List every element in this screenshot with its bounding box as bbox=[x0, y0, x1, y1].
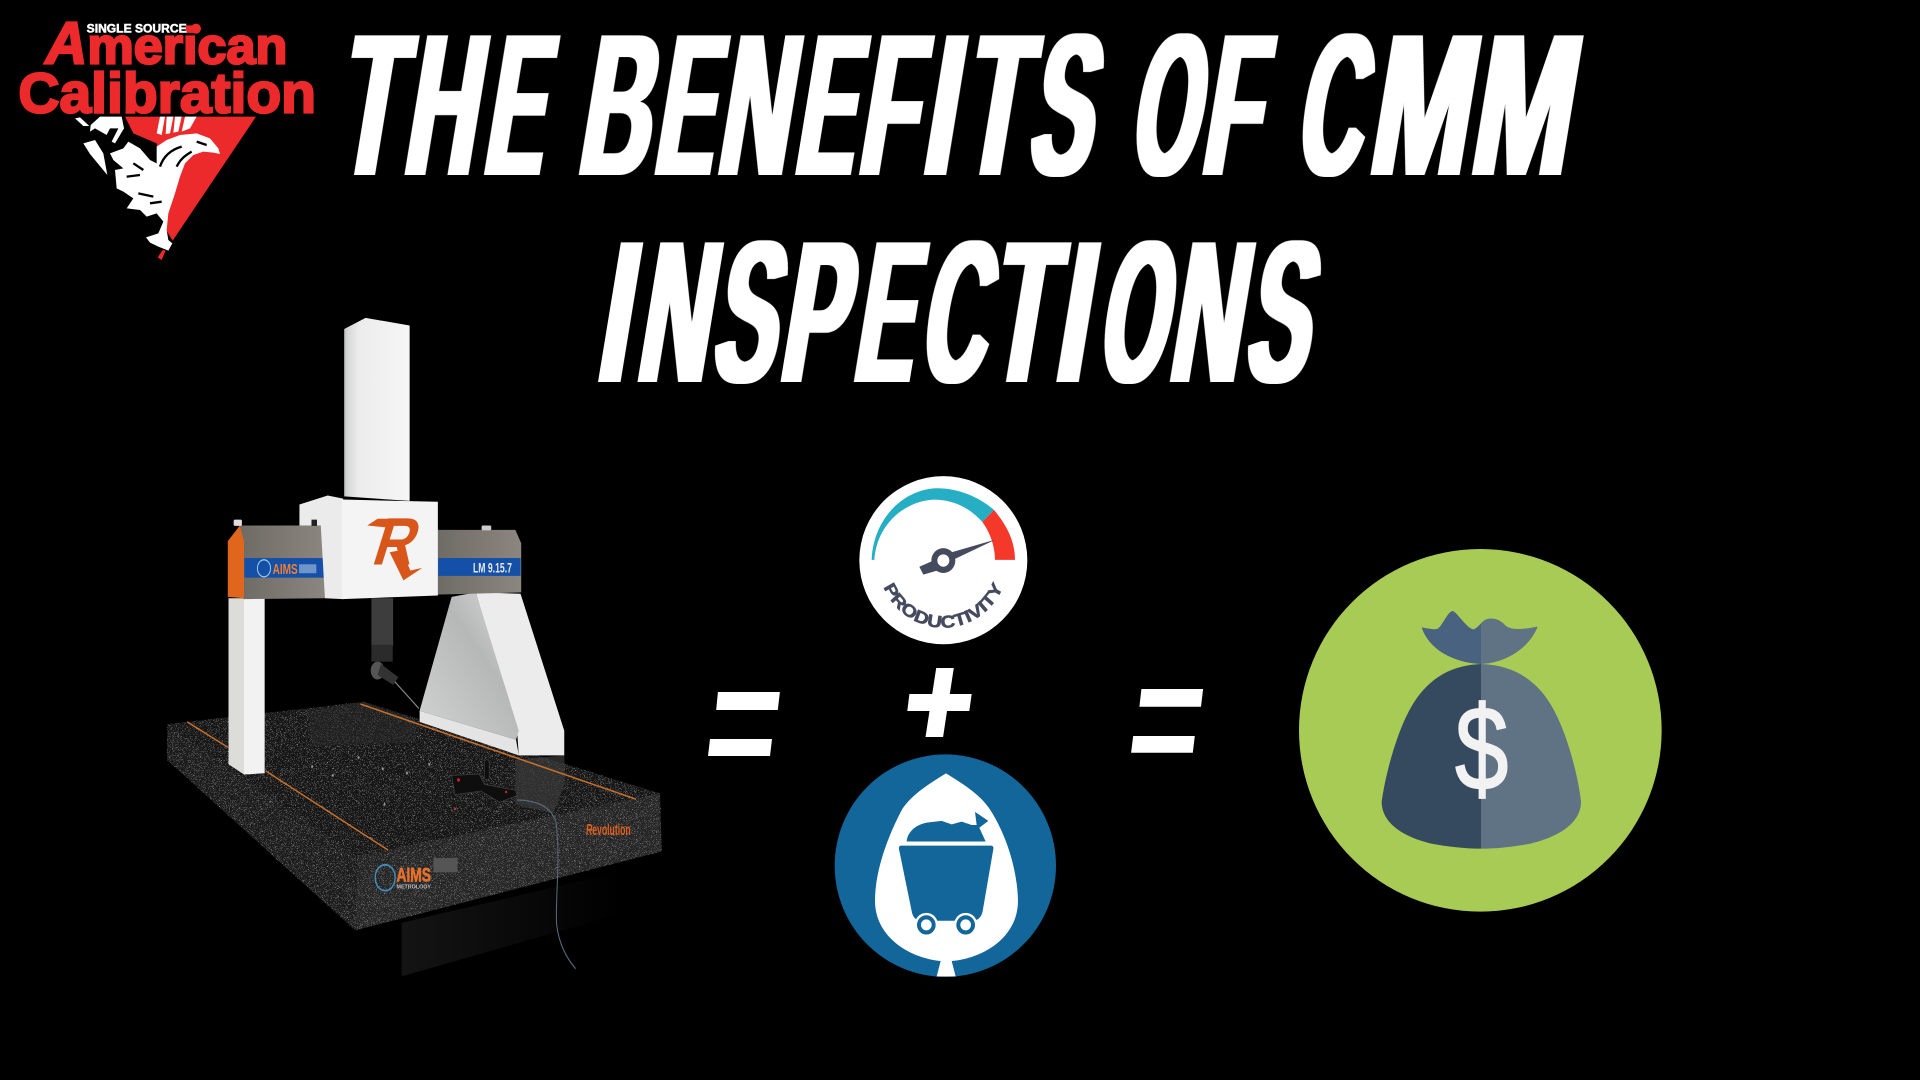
granite logo AIMS: METROLOGY bbox=[397, 884, 432, 891]
title line 2: C bbox=[911, 199, 1012, 426]
gauge needle bbox=[919, 540, 996, 575]
granite logo AIMS: AIMS bbox=[397, 864, 431, 886]
equals sign right bbox=[1131, 689, 1203, 753]
icon: productivity gauge bbox=[859, 476, 1028, 644]
title line 2: I bbox=[587, 199, 654, 426]
R logo: R bbox=[365, 505, 429, 580]
left pillar bbox=[229, 598, 265, 775]
gauge label bbox=[880, 577, 1006, 628]
left beam: AIMS bbox=[273, 561, 298, 577]
title line 2: S bbox=[1236, 199, 1335, 426]
title line 2: S bbox=[703, 199, 802, 426]
leaf shape bbox=[875, 773, 1018, 977]
logo wordmark American: merican bbox=[87, 17, 287, 74]
cart body bbox=[899, 846, 993, 921]
dollar sign: $ bbox=[1455, 683, 1508, 816]
icon: money bag bbox=[1299, 549, 1662, 912]
gauge teal arc bbox=[872, 488, 994, 560]
controller bbox=[452, 760, 517, 802]
title line 2: T bbox=[979, 199, 1076, 426]
title line 2: O bbox=[1089, 199, 1192, 426]
logo eagle bbox=[75, 117, 220, 251]
bag tie bbox=[1422, 611, 1538, 664]
equals sign left bbox=[708, 692, 780, 756]
bag body bbox=[1382, 664, 1581, 849]
logo: American Calibration bbox=[18, 9, 316, 260]
cable bbox=[517, 800, 576, 969]
gauge red arc bbox=[982, 510, 1015, 560]
icon: productivity gauge: PRODUCTIVITY bbox=[884, 581, 1002, 628]
logo wordmark American: A bbox=[44, 9, 87, 76]
granite logo Revolution: Revolution bbox=[586, 821, 631, 839]
Z column bbox=[344, 318, 410, 501]
title line 2 bbox=[587, 199, 1335, 426]
right support bbox=[420, 592, 564, 755]
title line 2: N bbox=[1160, 199, 1267, 426]
left beam bbox=[228, 520, 325, 599]
cart wheels bbox=[915, 913, 977, 937]
probe bbox=[371, 598, 419, 708]
title line 2: E bbox=[844, 199, 939, 426]
logo dot bbox=[191, 24, 201, 34]
carriage bbox=[299, 496, 438, 599]
granite table bbox=[167, 702, 662, 930]
title bbox=[327, 0, 1595, 426]
cart pile bbox=[907, 812, 988, 842]
title line 2: I bbox=[1045, 199, 1112, 426]
plus sign bbox=[907, 668, 972, 737]
CMM machine bbox=[167, 318, 662, 976]
logo tagline: SINGLE SOURCE bbox=[87, 22, 187, 35]
title line 1 bbox=[327, 0, 1595, 219]
icon: mine cart bbox=[835, 754, 1056, 977]
under-table shadow bbox=[402, 871, 622, 976]
logo triangle bbox=[125, 117, 256, 241]
logo tail tip bbox=[158, 250, 166, 260]
right beam: LM 9.15.7 bbox=[473, 560, 512, 576]
granite logo AIMS bbox=[375, 858, 457, 891]
title line 2: P bbox=[770, 199, 872, 426]
logo wordmark Calibration: Calibration bbox=[18, 62, 316, 126]
title line 2: N bbox=[627, 199, 734, 426]
right beam bbox=[436, 525, 521, 595]
